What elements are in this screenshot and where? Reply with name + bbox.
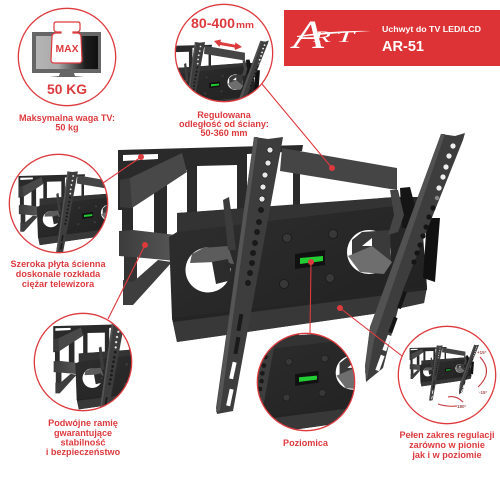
weight value: 50 KG — [47, 82, 87, 97]
ring — [398, 326, 496, 424]
leader: wall plate — [103, 154, 144, 183]
caption: max weight: Maksymalna waga TV: — [19, 113, 115, 123]
detail view — [176, 40, 269, 101]
callout: rotation range — [398, 326, 496, 424]
leader: rotation — [337, 305, 402, 356]
leader: wall distance — [262, 84, 335, 171]
wall plate — [118, 145, 303, 235]
callout: level — [256, 332, 356, 432]
callout ring — [18, 8, 116, 106]
left tilt bracket — [216, 137, 283, 414]
pivots — [122, 205, 133, 233]
logo: ART: A — [289, 12, 325, 57]
detail view — [258, 334, 354, 430]
arrows: horizontal swivel — [438, 397, 463, 406]
caption: double arm: gwarantujące — [54, 428, 112, 438]
leader lines — [103, 84, 402, 356]
angle labels: 180° — [457, 404, 467, 409]
ring — [34, 313, 132, 411]
header banner — [284, 10, 500, 66]
callout: max weight — [18, 8, 116, 106]
arrow: vertical tilt — [478, 357, 487, 387]
leader: level — [308, 259, 314, 333]
callout: wall distance — [174, 4, 274, 102]
caption: wall plate: doskonale rozkłada — [16, 269, 101, 279]
leader: double arm — [108, 242, 148, 319]
caption: wall distance: odległość od ściany: — [179, 119, 269, 129]
distance value — [191, 16, 254, 31]
model: AR-51 — [382, 39, 424, 55]
middle arm — [119, 230, 176, 261]
caption: level: Poziomica — [283, 438, 329, 448]
main product: wall mount — [118, 133, 465, 414]
distance value: mm — [236, 20, 254, 30]
angle labels: -15° — [479, 390, 488, 395]
caption: wall distance: 50-360 mm — [200, 128, 248, 138]
ring — [9, 154, 108, 253]
caption: rotation range: Pełen zakres regulacji — [399, 430, 495, 440]
right arm — [280, 148, 397, 190]
callout: wall plate — [8, 154, 108, 254]
caption: double arm: Podwójne ramię — [48, 418, 118, 428]
icon: weight: MAX — [56, 44, 79, 55]
latches — [223, 197, 236, 250]
product type: Uchwyt do TV LED/LCD — [382, 24, 481, 34]
caption: rotation range: jak i w poziomie — [411, 450, 482, 460]
caption: double arm: stabilność — [61, 438, 105, 448]
caption: max weight: 50 kg — [55, 122, 79, 132]
left hole — [186, 248, 230, 292]
right hole — [347, 230, 391, 274]
distance value: 80-400 — [191, 16, 235, 31]
detail view — [18, 171, 108, 252]
detail view — [410, 345, 479, 401]
right tilt bracket — [365, 133, 465, 382]
ring — [175, 4, 273, 102]
caption: rotation range: zarówno w pionie — [409, 440, 485, 450]
screws — [280, 230, 338, 288]
angle labels: +15° — [477, 350, 487, 355]
detail view — [53, 324, 132, 410]
caption: wall plate: Szeroka płyta ścienna — [10, 259, 106, 269]
upper left arm — [120, 153, 187, 208]
caption: wall plate: ciężar telewizora — [22, 279, 95, 289]
ring — [257, 333, 355, 431]
logo: ART: R — [311, 29, 331, 46]
icon: TV — [32, 32, 101, 77]
logo: ART — [289, 12, 371, 57]
angle labels — [457, 350, 488, 409]
logo: ART: T — [336, 29, 356, 46]
caption: wall distance: Regulowana — [197, 110, 252, 120]
caption: double arm: i bezpieczeństwo — [46, 447, 121, 457]
lowest left arm — [123, 260, 172, 305]
panel — [169, 197, 427, 342]
arrow: distance — [214, 40, 242, 50]
callout: double arm — [34, 312, 132, 412]
level — [295, 250, 325, 269]
